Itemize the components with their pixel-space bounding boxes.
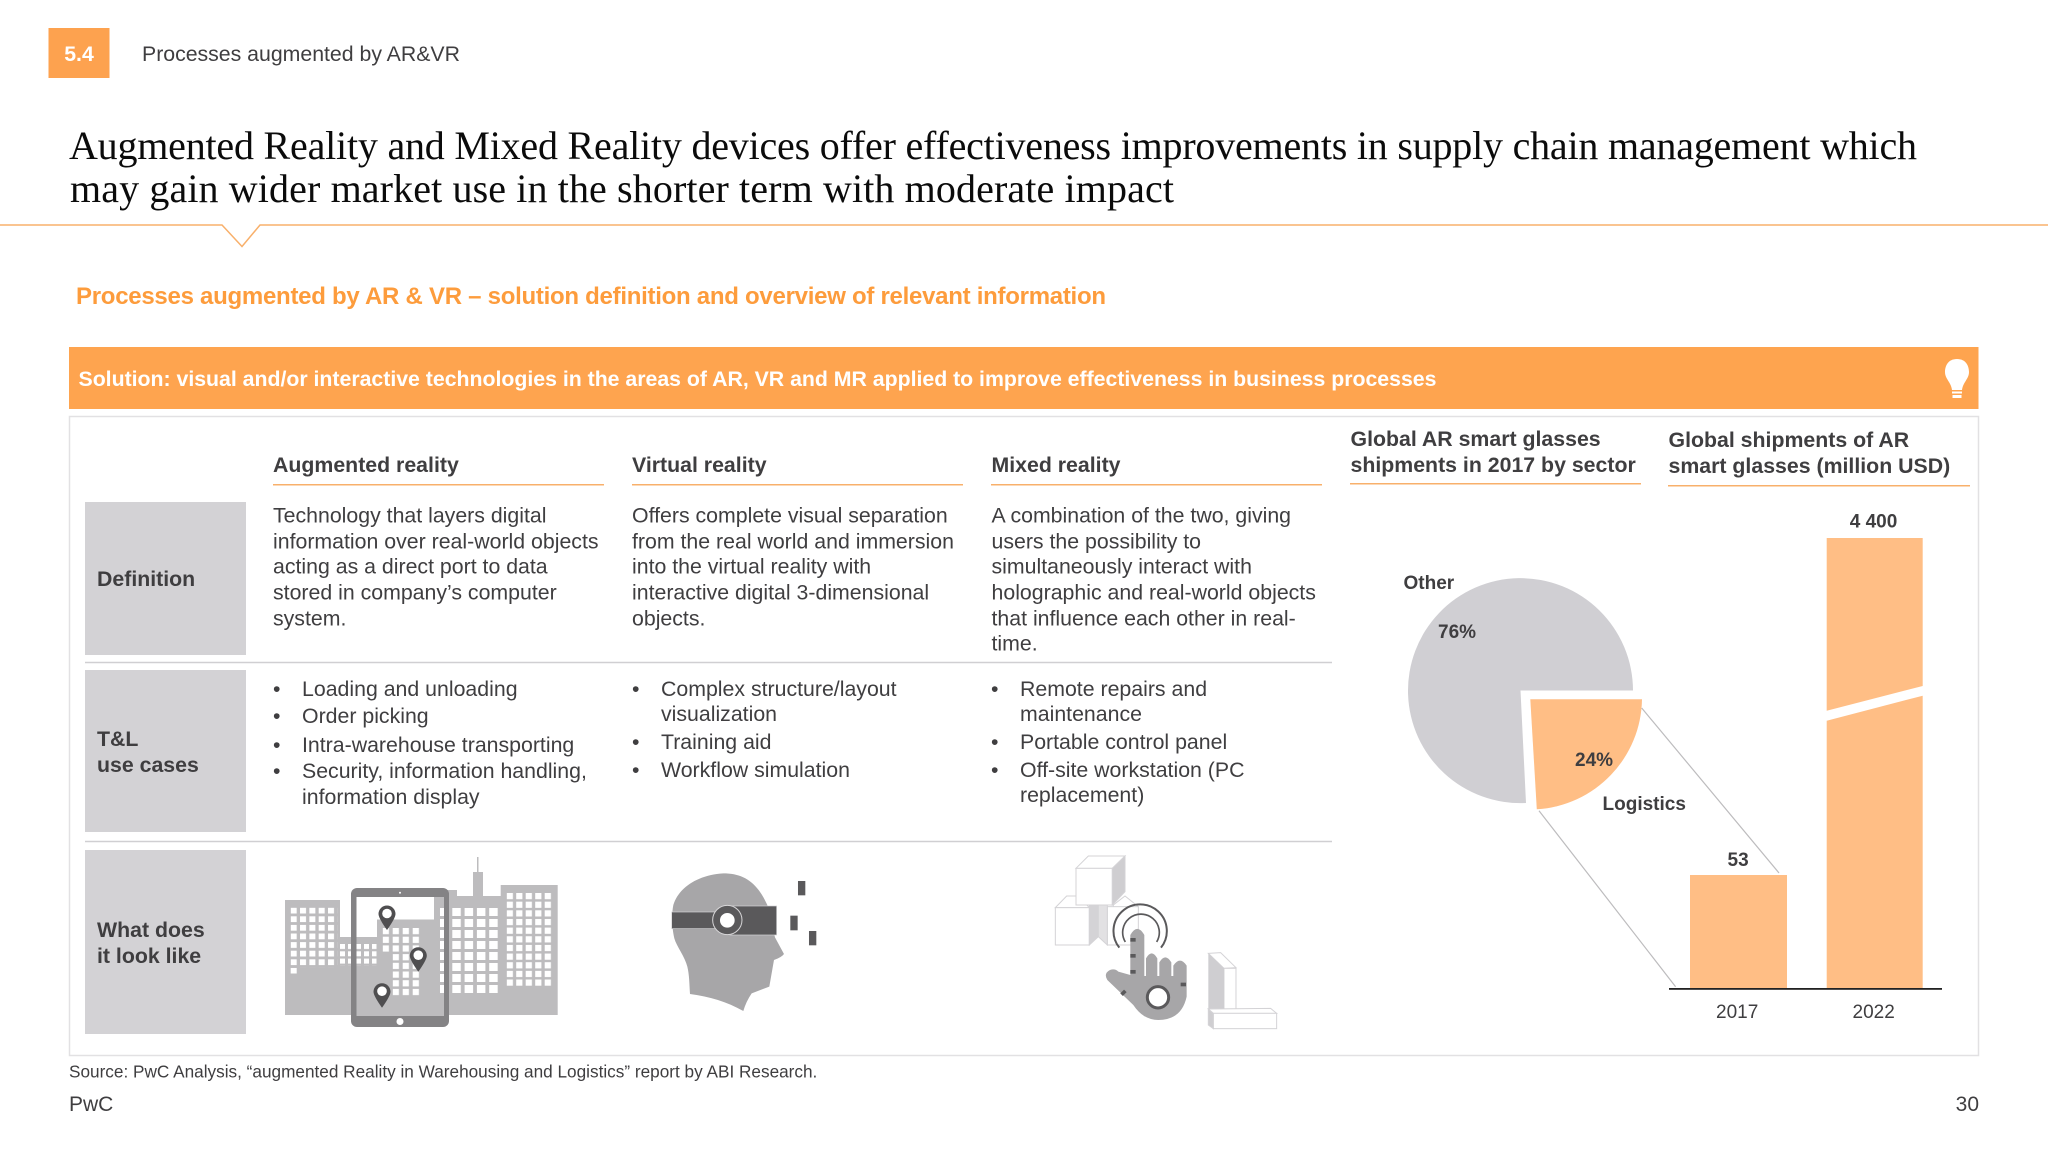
definition: augmented reality bbox=[273, 504, 599, 630]
bar labels bbox=[1716, 512, 1897, 1023]
row label: What does it look like: it look like bbox=[97, 944, 201, 968]
definition: mixed reality: holographic and real-world objects bbox=[992, 580, 1316, 604]
bar: 2022 with axis break bbox=[1827, 538, 1923, 988]
column heading: Global AR smart glasses shipments by sector: Global AR smart glasses bbox=[1350, 427, 1601, 451]
use cases: virtual reality: Training aid bbox=[661, 730, 772, 754]
title bbox=[69, 123, 1917, 211]
page number: 30 bbox=[1956, 1093, 1979, 1116]
pie labels: 76% bbox=[1438, 622, 1476, 643]
title: may gain wider market use in the shorter term with moderate impact bbox=[70, 166, 1174, 211]
use cases: mixed reality: Remote repairs and bbox=[1020, 677, 1207, 701]
solution banner: Solution: visual and/or interactive technologies in the areas of AR, VR and MR applied to improve effectiveness in business processes bbox=[78, 367, 1436, 391]
row label: T&L use cases bbox=[85, 670, 246, 832]
use cases: mixed reality: • bbox=[991, 677, 998, 701]
use cases: virtual reality: visualization bbox=[661, 702, 777, 726]
use cases: augmented reality bbox=[273, 677, 587, 809]
use cases: augmented reality: Intra-warehouse transporting bbox=[302, 733, 574, 757]
pie chart: 2017 shipments by sector bbox=[1404, 573, 1686, 815]
definition: mixed reality: users the possibility to bbox=[992, 530, 1201, 554]
definition: augmented reality: acting as a direct port to data bbox=[273, 554, 548, 578]
use cases: augmented reality: • bbox=[273, 733, 280, 757]
row label: What does it look like: What does bbox=[97, 918, 205, 942]
connector lines from pie to bar bbox=[1539, 708, 1779, 987]
definition: virtual reality: interactive digital 3-dimensional bbox=[632, 580, 929, 604]
use cases: mixed reality bbox=[991, 677, 1244, 807]
use cases: virtual reality: • bbox=[632, 677, 639, 701]
solution banner bbox=[69, 347, 1978, 409]
use cases: augmented reality: information display bbox=[302, 785, 480, 809]
icon: city seen through tablet bbox=[285, 857, 558, 1027]
use cases: virtual reality: • bbox=[632, 758, 639, 782]
column heading: Mixed reality: Mixed reality bbox=[992, 453, 1121, 477]
use cases: virtual reality: Complex structure/layout bbox=[661, 677, 897, 701]
slice: logistics 24% bbox=[1530, 699, 1642, 809]
use cases: mixed reality: maintenance bbox=[1020, 702, 1142, 726]
pie labels: 24% bbox=[1575, 750, 1613, 771]
content panel frame bbox=[70, 416, 1978, 1056]
row label: Definition: Definition bbox=[97, 567, 195, 591]
definition: virtual reality bbox=[632, 504, 954, 630]
section number badge: 5.4 bbox=[64, 42, 94, 66]
pie labels: Other bbox=[1404, 573, 1455, 594]
definition: augmented reality: system. bbox=[273, 606, 346, 630]
use cases: augmented reality: • bbox=[273, 677, 280, 701]
use cases: virtual reality: Workflow simulation bbox=[661, 758, 850, 782]
slice: other 76% bbox=[1408, 578, 1633, 803]
bar chart: shipments in million USD bbox=[1669, 512, 1942, 1023]
row label: T&L use cases: T&L bbox=[97, 727, 138, 751]
use cases: mixed reality: replacement) bbox=[1020, 783, 1144, 807]
bar labels: 2022 bbox=[1852, 1002, 1895, 1023]
bar labels: 2017 bbox=[1716, 1002, 1758, 1023]
icon: head with VR headset bbox=[672, 873, 816, 1011]
pie labels: Logistics bbox=[1602, 794, 1686, 815]
icon: light bulb bbox=[1945, 359, 1969, 398]
use cases: mixed reality: Portable control panel bbox=[1020, 730, 1227, 754]
pie labels bbox=[1404, 573, 1686, 815]
breadcrumb heading: Processes augmented by AR&VR bbox=[142, 42, 460, 66]
tablet bbox=[351, 888, 449, 1027]
definition: augmented reality: stored in company’s computer bbox=[273, 580, 557, 604]
column heading: Global AR smart glasses shipments by sector bbox=[1350, 427, 1641, 484]
use cases: augmented reality: • bbox=[273, 704, 280, 728]
use cases: augmented reality: Security, information handling, bbox=[302, 759, 587, 783]
definition: augmented reality: information over real-world objects bbox=[273, 530, 599, 554]
definition: virtual reality: from the real world and immersion bbox=[632, 530, 954, 554]
sub heading: Processes augmented by AR & VR – solution definition and overview of relevant information bbox=[76, 283, 1106, 310]
bar: 2017 bbox=[1690, 875, 1787, 988]
definition: virtual reality: Offers complete visual separation bbox=[632, 504, 948, 528]
row label: What does it look like bbox=[85, 850, 246, 1034]
row label: Definition bbox=[85, 502, 246, 655]
footer: PwC: PwC bbox=[69, 1093, 113, 1116]
definition: mixed reality: A combination of the two, giving bbox=[992, 504, 1291, 528]
bar labels: 4 400 bbox=[1850, 512, 1897, 532]
section number badge bbox=[48, 28, 110, 78]
definition: mixed reality: simultaneously interact with bbox=[992, 554, 1252, 578]
definition: virtual reality: objects. bbox=[632, 606, 705, 630]
column heading: Global shipments of AR smart glasses: smart glasses (million USD) bbox=[1668, 454, 1950, 478]
title rule with chevron bbox=[0, 225, 2048, 246]
use cases: augmented reality: Loading and unloading bbox=[302, 677, 518, 701]
source note: Source: PwC Analysis, “augmented Reality in Warehousing and Logistics” report by ABI Research. bbox=[69, 1062, 817, 1082]
row label: T&L use cases: use cases bbox=[97, 753, 199, 777]
use cases: mixed reality: • bbox=[991, 758, 998, 782]
column heading: Global shipments of AR smart glasses: Global shipments of AR bbox=[1668, 428, 1909, 452]
use cases: augmented reality: Order picking bbox=[302, 704, 429, 728]
column heading: Virtual reality: Virtual reality bbox=[632, 453, 767, 477]
definition: mixed reality: that influence each other in real- bbox=[992, 606, 1296, 630]
use cases: mixed reality: • bbox=[991, 730, 998, 754]
use cases: virtual reality: • bbox=[632, 730, 639, 754]
use cases: augmented reality: • bbox=[273, 759, 280, 783]
definition: mixed reality: time. bbox=[992, 632, 1038, 656]
column heading: Augmented reality: Augmented reality bbox=[273, 453, 459, 477]
use cases: mixed reality: Off-site workstation (PC bbox=[1020, 758, 1244, 782]
map pins bbox=[374, 906, 427, 1008]
column heading: Global shipments of AR smart glasses bbox=[1668, 428, 1970, 486]
bar labels: 53 bbox=[1728, 850, 1749, 871]
definition: virtual reality: into the virtual reality with bbox=[632, 554, 871, 578]
definition: mixed reality bbox=[992, 504, 1316, 656]
definition: augmented reality: Technology that layers digital bbox=[273, 504, 546, 528]
row dividers bbox=[85, 662, 1332, 842]
icon: hand interacting with holographic blocks bbox=[1055, 856, 1277, 1029]
column heading: Global AR smart glasses shipments by sector: shipments in 2017 by sector bbox=[1350, 453, 1636, 477]
use cases: virtual reality bbox=[632, 677, 897, 782]
title: Augmented Reality and Mixed Reality devices offer effectiveness improvements in supply chain management which bbox=[69, 123, 1917, 168]
